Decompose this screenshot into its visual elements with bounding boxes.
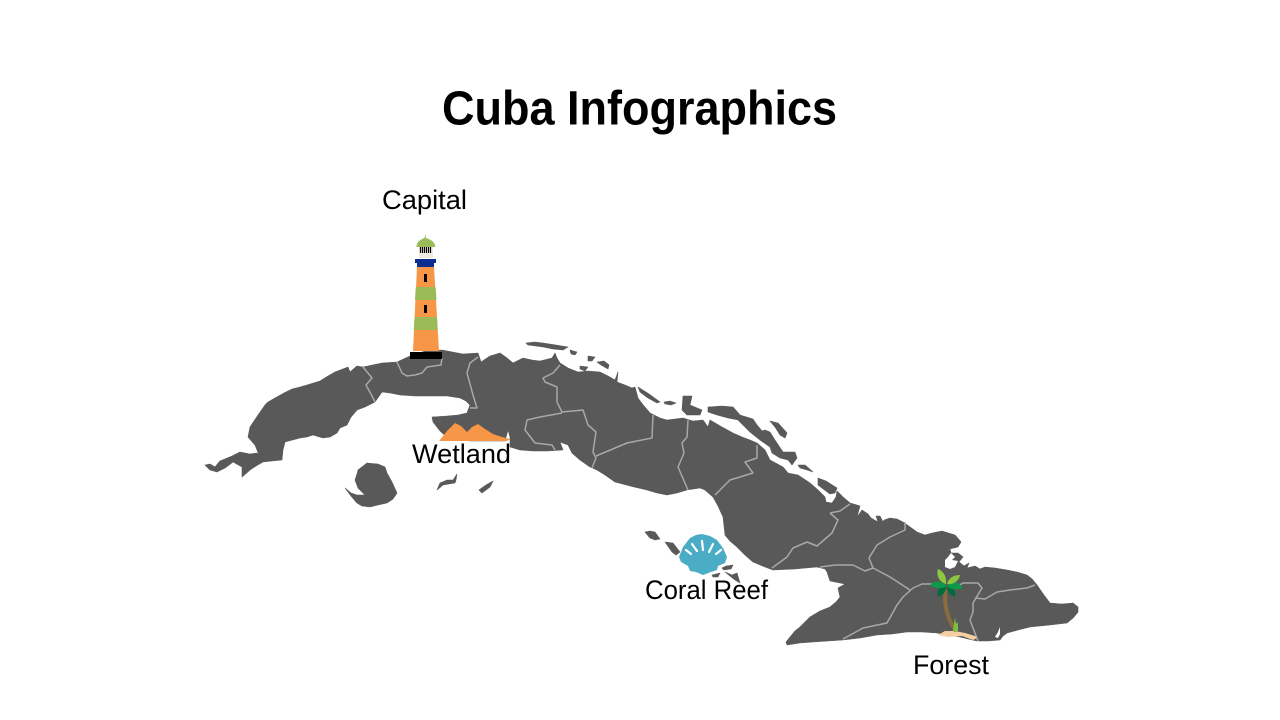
icon: shell (679, 534, 727, 575)
title: Cuba Infographics (442, 82, 837, 136)
label: Forest: Forest (913, 650, 989, 680)
Guantanamo bay notch (995, 627, 1000, 638)
map of Cuba (205, 342, 1078, 645)
icon: lighthouse (410, 234, 442, 359)
main island (205, 350, 1078, 645)
Nipe bay (945, 553, 958, 569)
label: Capital: Capital (382, 185, 467, 215)
icon: wetland mound (439, 423, 510, 441)
Isla de la Juventud (345, 463, 397, 507)
southern islets (437, 474, 740, 583)
label: Coral Reef: Coral Reef (645, 575, 768, 605)
label: Wetland: Wetland (412, 439, 511, 469)
northern cays (526, 342, 837, 494)
provincial borders (363, 357, 1035, 641)
icon: palm tree (930, 569, 977, 640)
